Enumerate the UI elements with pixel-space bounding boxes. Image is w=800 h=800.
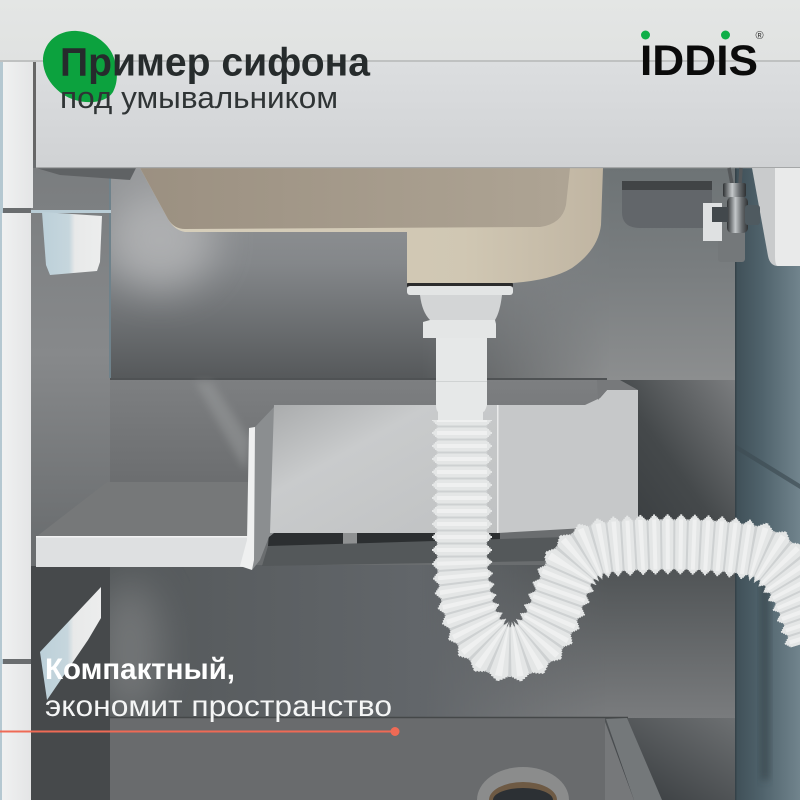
sink counter slab (0, 0, 800, 168)
upper shelf recess (36, 482, 248, 537)
heading: Пример сифона (60, 40, 371, 84)
chrome valve and hoses (703, 168, 760, 241)
cabinet back wall (0, 160, 800, 800)
white shelf front edge (36, 536, 248, 567)
caption bold line: Компактный, (45, 653, 235, 686)
beige basin (140, 168, 603, 283)
green accent blob (43, 31, 117, 102)
logo: IDDIS: ® (756, 30, 764, 42)
caption regular line: экономит пространство (45, 690, 392, 723)
caption block (0, 653, 400, 736)
lower basin and drain hole (110, 718, 662, 800)
upper hinge bracket (31, 210, 111, 275)
coral underline with dot (0, 727, 400, 736)
title block (43, 31, 371, 115)
left white column (0, 60, 33, 800)
lower hinge bracket (40, 587, 101, 700)
right wall recess (622, 181, 745, 262)
corrugated white hose (432, 420, 800, 682)
upper drain flange (407, 283, 513, 425)
right white basin side (752, 168, 800, 266)
left cabinet side wall (31, 168, 136, 800)
drawer box (240, 380, 638, 570)
shadow strip under drawer (262, 533, 600, 566)
subheading: под умывальником (60, 80, 338, 115)
right bluish cabinet panel (735, 168, 800, 800)
logo: IDDIS: IDDIS (640, 37, 758, 85)
